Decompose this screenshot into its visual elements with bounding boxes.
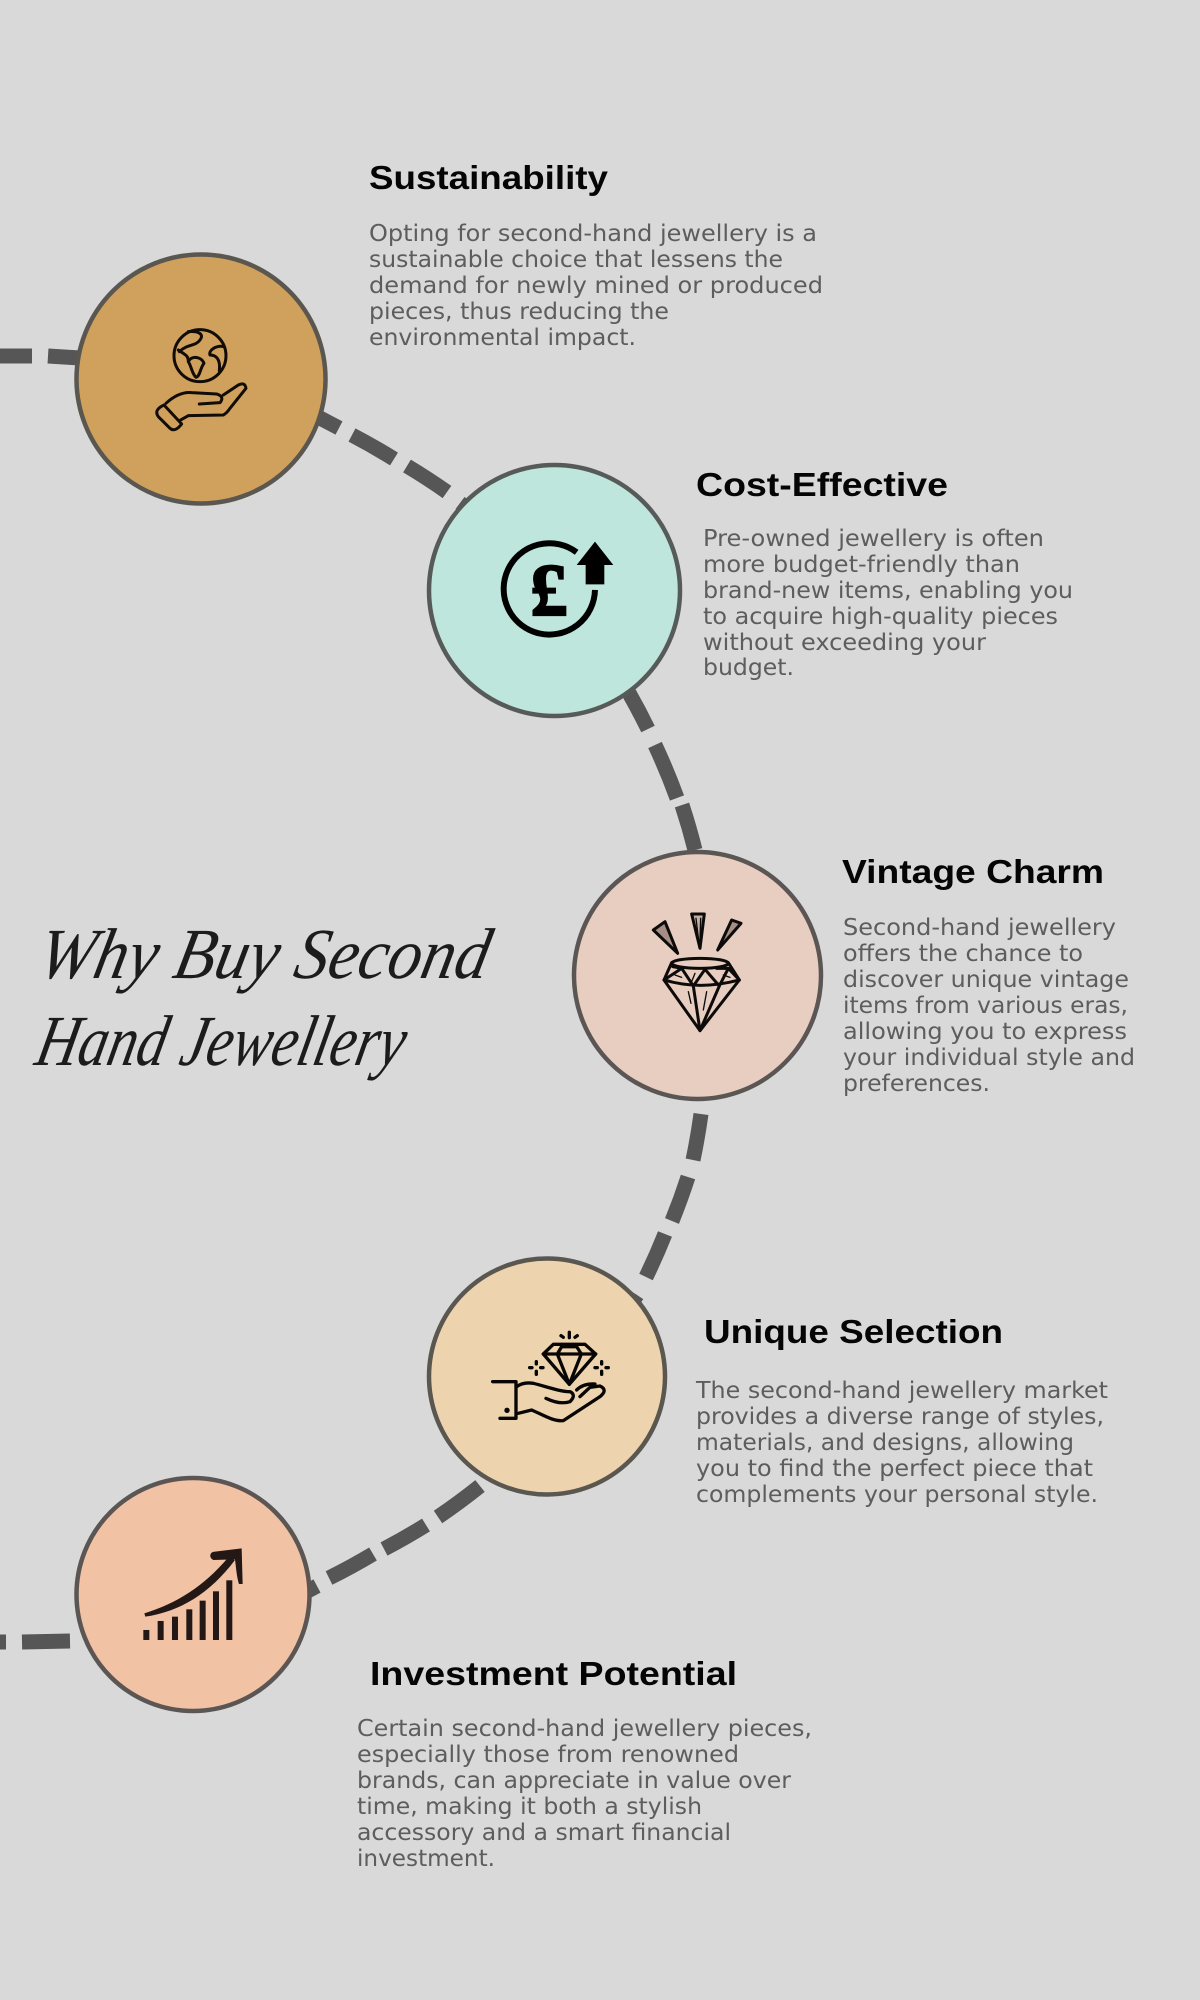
heading: unique selection: Unique Selection bbox=[704, 1313, 1003, 1350]
text block: unique selection: complements your personal style. bbox=[696, 1482, 1098, 1508]
text block: investment potential: brands, can appreciate in value over bbox=[357, 1768, 792, 1794]
circle: investment potential bbox=[76, 1478, 310, 1711]
text block: investment potential: investment. bbox=[357, 1846, 495, 1872]
text block: investment potential: especially those from renowned bbox=[357, 1742, 739, 1768]
text block: investment potential: accessory and a smart financial bbox=[357, 1820, 731, 1846]
text block: cost-effective bbox=[703, 526, 1073, 681]
text block: sustainability: demand for newly mined or produced bbox=[369, 273, 823, 299]
text block: unique selection: you to find the perfect piece that bbox=[696, 1456, 1093, 1482]
heading: vintage charm: Vintage Charm bbox=[842, 853, 1104, 890]
text block: vintage charm: Second-hand jewellery bbox=[843, 915, 1116, 941]
icon: globe in hand bbox=[157, 330, 246, 430]
icon: pound with up arrow bbox=[504, 542, 613, 635]
circle: unique selection bbox=[429, 1258, 665, 1494]
heading: sustainability: Sustainability bbox=[369, 159, 609, 196]
icon: diamond above hand bbox=[493, 1332, 608, 1421]
text block: investment potential bbox=[357, 1716, 812, 1872]
text block: cost-effective: brand-new items, enabling you bbox=[703, 578, 1073, 604]
text block: vintage charm bbox=[843, 915, 1135, 1097]
text block: unique selection: materials, and designs, allowing bbox=[696, 1430, 1074, 1456]
title: Hand Jewellery bbox=[29, 1001, 415, 1081]
panel: unique selection bbox=[429, 1258, 1108, 1508]
text block: vintage charm: your individual style and bbox=[843, 1045, 1135, 1071]
heading: investment potential: Investment Potential bbox=[370, 1655, 737, 1692]
panel: vintage charm bbox=[574, 852, 1135, 1099]
text block: sustainability: environmental impact. bbox=[369, 325, 636, 351]
text block: cost-effective: without exceeding your bbox=[703, 630, 987, 656]
circle: vintage charm bbox=[574, 852, 821, 1099]
icon: pound with up arrow: £ bbox=[530, 550, 567, 632]
text block: vintage charm: items from various eras, bbox=[843, 993, 1128, 1019]
text block: vintage charm: discover unique vintage bbox=[843, 967, 1129, 993]
text block: investment potential: Certain second-hand jewellery pieces, bbox=[357, 1716, 812, 1742]
dashed curved path connecting the circles bbox=[0, 356, 701, 1642]
text block: unique selection: The second-hand jewellery market bbox=[695, 1378, 1108, 1404]
title: Why Buy Second bbox=[32, 914, 499, 994]
circle: cost-effective bbox=[429, 465, 680, 716]
text block: cost-effective: more budget-friendly than bbox=[703, 552, 1020, 578]
text block: sustainability: pieces, thus reducing the bbox=[369, 299, 669, 325]
title bbox=[29, 914, 499, 1081]
text block: sustainability: Opting for second-hand jewellery is a bbox=[369, 221, 817, 247]
text block: unique selection: provides a diverse range of styles, bbox=[696, 1404, 1104, 1430]
heading: cost-effective: Cost-Effective bbox=[696, 466, 948, 503]
panel: investment potential bbox=[76, 1478, 812, 1872]
text block: unique selection bbox=[695, 1378, 1108, 1508]
text block: cost-effective: to acquire high-quality pieces bbox=[703, 604, 1058, 630]
text block: sustainability bbox=[369, 221, 823, 351]
text block: cost-effective: budget. bbox=[703, 655, 794, 681]
text block: vintage charm: allowing you to express bbox=[843, 1019, 1127, 1045]
text block: vintage charm: offers the chance to bbox=[843, 941, 1083, 967]
circle: sustainability bbox=[76, 254, 326, 504]
text block: cost-effective: Pre-owned jewellery is often bbox=[703, 526, 1044, 552]
panel: cost-effective bbox=[429, 465, 1073, 716]
text block: investment potential: time, making it both a stylish bbox=[357, 1794, 702, 1820]
text block: sustainability: sustainable choice that lessens the bbox=[369, 247, 783, 273]
icon: vintage diamond bbox=[653, 914, 741, 1031]
text block: vintage charm: preferences. bbox=[843, 1071, 990, 1097]
panel: sustainability bbox=[76, 159, 823, 504]
icon: rising bar chart with arrow bbox=[143, 1548, 243, 1640]
